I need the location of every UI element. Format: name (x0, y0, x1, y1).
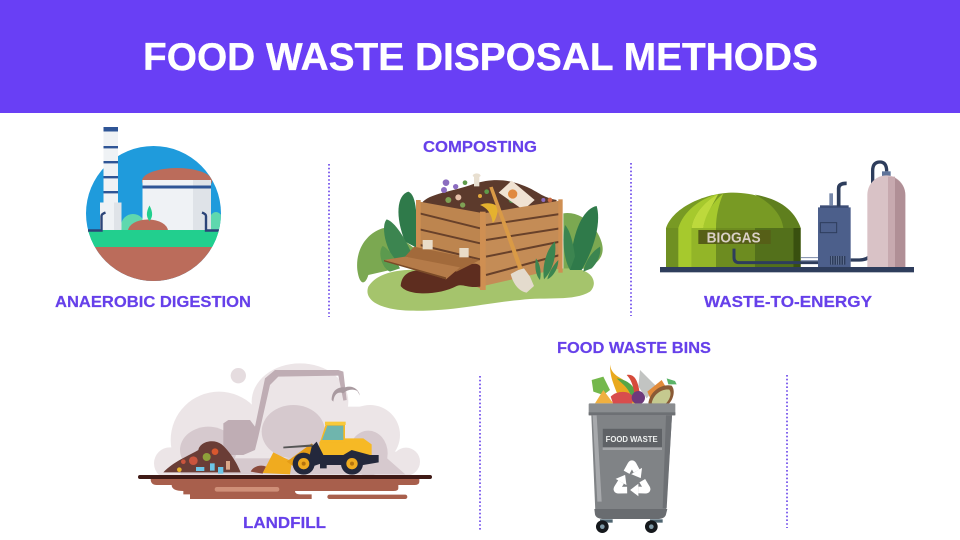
label: biogas: BIOGAS (707, 230, 761, 246)
label: bin tag: FOOD WASTE (606, 434, 658, 444)
icon: recycling symbol (612, 464, 650, 498)
icon: landfill scene (138, 363, 432, 499)
label: waste-to-energy: WASTE-TO-ENERGY (704, 294, 872, 311)
icon: anaerobic digestion plant (86, 127, 224, 283)
label: anaerobic digestion: ANAEROBIC DIGESTION (55, 294, 251, 311)
icon: food waste bin (589, 364, 677, 533)
label: landfill: LANDFILL (243, 515, 326, 532)
title: FOOD WASTE DISPOSAL METHODS (143, 36, 818, 79)
header banner (0, 0, 960, 113)
label: food waste bins: FOOD WASTE BINS (557, 340, 711, 357)
icon: biogas plant (660, 162, 914, 272)
icon: compost bin (357, 173, 603, 311)
label: composting: COMPOSTING (423, 139, 537, 156)
